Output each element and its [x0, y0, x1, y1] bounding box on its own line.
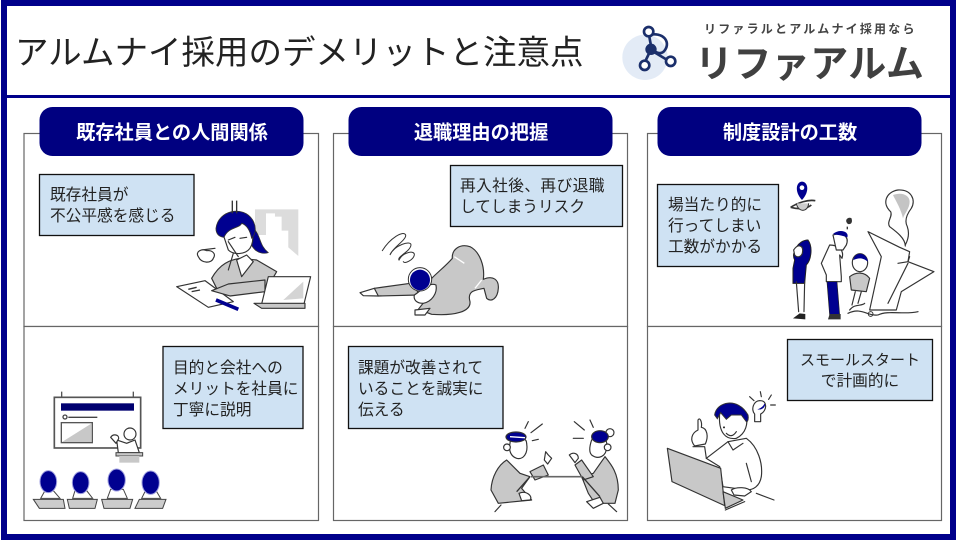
callout: solution: いることを誠実に	[358, 380, 484, 398]
callout: solution: 目的と会社への	[173, 359, 283, 377]
icon: man with laptop and idea	[667, 392, 775, 510]
icon: people looking at wreck	[791, 182, 934, 319]
heading: 制度設計の工数	[723, 121, 857, 144]
callout: solution: メリットを社員に	[173, 380, 298, 398]
panel frame	[334, 134, 628, 520]
callout: demerit: 場当たり的に	[668, 196, 762, 214]
logo tagline: リファラルとアルムナイ採用なら	[704, 21, 917, 36]
panel: 退職理由の把握	[334, 107, 628, 520]
callout: solution: で計画的に	[821, 372, 899, 390]
callout: solution	[163, 346, 303, 428]
logo wordmark: リファアルム	[695, 44, 924, 86]
heading	[348, 107, 612, 156]
icon: collapsed person	[360, 234, 498, 315]
heading	[658, 107, 922, 156]
logo	[622, 21, 924, 86]
heading: 退職理由の把握	[414, 122, 548, 144]
panel frame	[24, 134, 318, 520]
panel: 既存社員との人間関係	[24, 107, 318, 520]
callout: demerit: 既存社員が	[50, 186, 129, 204]
icon: presentation to audience	[33, 392, 166, 508]
callout: solution: 課題が改善されて	[358, 359, 483, 377]
callout: demerit: 再入社後、再び退職	[460, 177, 605, 195]
panel: 制度設計の工数	[648, 107, 942, 520]
callout: demerit: 不公平感を感じる	[50, 207, 176, 225]
callout: demerit	[450, 166, 622, 226]
icon: logo network mark	[622, 27, 675, 80]
callout: demerit	[658, 184, 778, 266]
callout: solution: 伝える	[358, 401, 405, 419]
callout: solution	[788, 340, 932, 400]
icon: two people talking	[491, 420, 618, 512]
callout: demerit	[40, 174, 194, 236]
callout: solution: 丁寧に説明	[173, 401, 251, 419]
heading	[40, 107, 304, 156]
callout: demerit: 工数がかかる	[668, 238, 762, 256]
icon: tired woman at desk	[177, 201, 311, 309]
panel frame	[648, 134, 942, 520]
callout: solution: スモールスタート	[800, 352, 920, 369]
title: アルムナイ採用のデメリットと注意点	[15, 35, 584, 72]
heading: 既存社員との人間関係	[76, 122, 268, 144]
callout: demerit: してしまうリスク	[460, 198, 585, 216]
callout: demerit: 行ってしまい	[668, 217, 761, 235]
callout: solution	[348, 346, 503, 428]
